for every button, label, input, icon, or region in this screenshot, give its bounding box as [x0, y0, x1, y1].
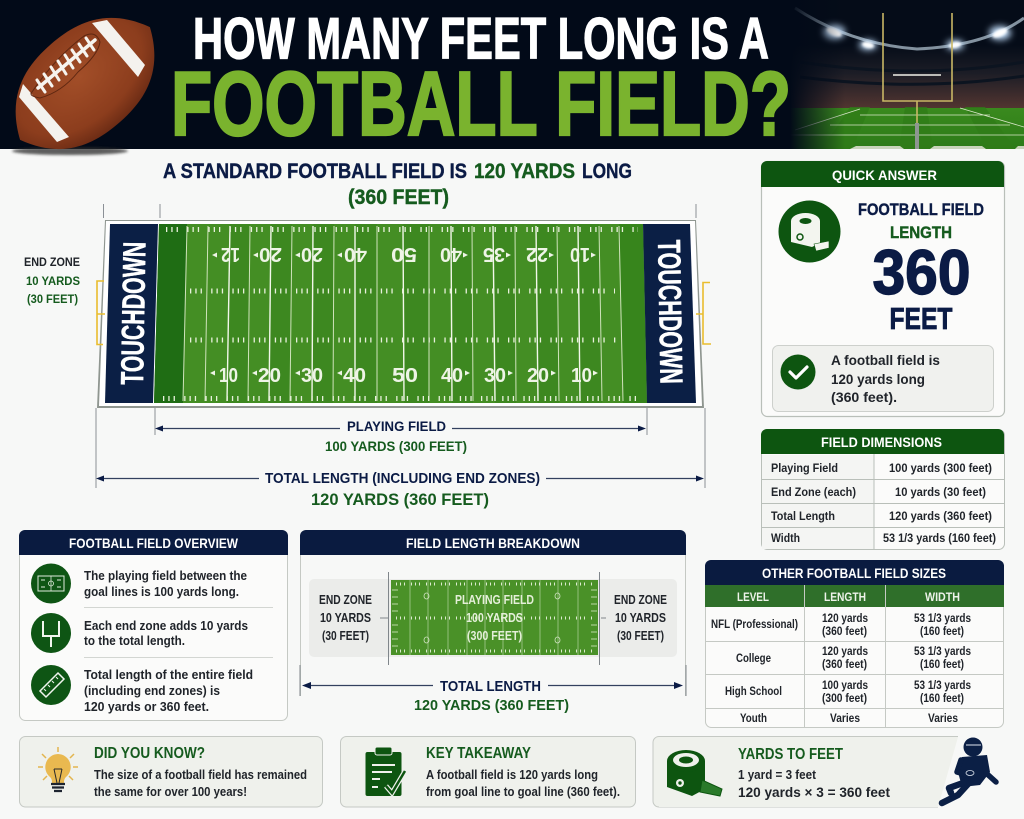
- overview text 2: to the total length.: [84, 633, 185, 648]
- answer callout: (360 feet).: [831, 390, 897, 405]
- left end zone text: (30 FEET): [322, 629, 369, 643]
- bottom yard numbers: 10: [219, 365, 238, 387]
- top yard numbers upside down: 20: [259, 243, 282, 265]
- did you know text: the same for over 100 years!: [94, 784, 247, 799]
- bottom yard numbers: 20: [258, 365, 281, 387]
- field turf: [154, 224, 647, 403]
- overview text 3: [84, 667, 253, 714]
- playing field dimension: PLAYING FIELD: [347, 418, 446, 434]
- icon: goal post: [31, 613, 71, 653]
- quick answer heading: QUICK ANSWER: [832, 167, 937, 183]
- icon: tape measure: [778, 200, 840, 262]
- end zone label: END ZONE: [24, 255, 80, 269]
- dimensions rows: Playing Field: [771, 461, 838, 475]
- column headers: [705, 585, 1004, 607]
- overview text 2: [84, 618, 248, 648]
- bottom yard numbers: 30: [301, 365, 323, 387]
- panel: did you know: DID YOU KNOW?: [94, 745, 205, 762]
- title: FOOTBALL FIELD?: [171, 54, 791, 155]
- overview text 1: goal lines is 100 yards long.: [84, 584, 239, 599]
- row college: [736, 646, 971, 671]
- top yard numbers upside down: 20: [301, 243, 323, 265]
- total length dimension: 120 YARDS (360 FEET): [311, 490, 489, 509]
- icon: light bulb: [38, 747, 78, 791]
- breakdown heading: FIELD LENGTH BREAKDOWN: [406, 535, 580, 551]
- left end zone bracket: [97, 281, 105, 344]
- length label: FOOTBALL FIELD: [858, 200, 984, 219]
- top yard numbers upside down: 40: [440, 243, 462, 265]
- big number 360 feet: 360: [872, 238, 970, 308]
- top yard numbers upside down: 12: [221, 243, 240, 265]
- left end zone text: [319, 593, 372, 643]
- total length dimension: TOTAL LENGTH (INCLUDING END ZONES): [265, 470, 540, 487]
- panel: yards to feet: [653, 736, 958, 807]
- overview text 1: The playing field between the: [84, 568, 247, 583]
- answer callout: [772, 346, 994, 412]
- icon: clipboard: [366, 747, 405, 796]
- top yard numbers upside down: 40: [344, 243, 367, 265]
- big number 360 feet: [872, 238, 970, 336]
- key takeaway text: A football field is 120 yards long: [426, 767, 598, 782]
- subtitle: (360 FEET): [348, 186, 449, 209]
- icon: ruler: [31, 665, 71, 705]
- answer callout: A football field is: [831, 353, 940, 368]
- right end zone text: END ZONE: [614, 593, 667, 607]
- overview text 3: (including end zones) is: [84, 683, 220, 698]
- top yard numbers upside down: [212, 243, 596, 265]
- mini field: (300 FEET): [467, 629, 522, 643]
- panel: other football field sizes table: [705, 560, 1004, 728]
- mini field: 100 YARDS: [466, 611, 523, 625]
- row high school: High School: [725, 686, 782, 698]
- top yard numbers upside down: 22: [526, 243, 548, 265]
- playing field dimension: 100 YARDS (300 FEET): [325, 438, 467, 454]
- conversion text: 120 yards × 3 = 360 feet: [738, 784, 890, 800]
- overview heading: [19, 530, 288, 555]
- subtitle: [163, 160, 632, 209]
- big number 360 feet: FEET: [890, 301, 953, 336]
- left end zone text: 10 YARDS: [320, 611, 371, 625]
- overview text 3: 120 yards or 360 feet.: [84, 699, 209, 714]
- dimensions rows: Width: [771, 531, 800, 545]
- bottom yard numbers: 10: [571, 365, 592, 387]
- top yard numbers upside down: 35: [483, 243, 505, 265]
- column headers: LENGTH: [824, 590, 866, 604]
- row college: 53 1/3 yards: [914, 646, 971, 658]
- row high school: (160 feet): [920, 693, 964, 705]
- row college: (360 feet): [822, 659, 867, 671]
- dimensions rows: 120 yards (360 feet): [889, 509, 992, 523]
- row college: College: [736, 653, 771, 665]
- title: [171, 6, 791, 155]
- subtitle: 120 YARDS: [474, 160, 575, 183]
- row high school: 100 yards: [822, 680, 868, 692]
- icon: field: [31, 564, 71, 604]
- total length arrow: TOTAL LENGTH: [440, 678, 541, 695]
- left end zone text: END ZONE: [319, 593, 372, 607]
- panel: field length breakdown: [300, 530, 686, 714]
- right end zone bracket: [696, 282, 711, 344]
- dimensions heading: [761, 429, 1004, 454]
- dimensions rows: 100 yards (300 feet): [889, 461, 992, 475]
- conversion text: 1 yard = 3 feet: [738, 768, 817, 782]
- mini field: PLAYING FIELD: [455, 593, 534, 607]
- main football field diagram: [97, 220, 704, 408]
- field extension lines: [96, 204, 705, 488]
- row NFL: [711, 613, 971, 638]
- did you know text: [94, 767, 307, 799]
- row NFL: 120 yards: [822, 613, 868, 625]
- bottom yard numbers: 40: [343, 365, 366, 387]
- panel: yards to feet: YARDS TO FEET: [738, 746, 843, 763]
- end zone label: [24, 255, 80, 306]
- end zone label: 10 YARDS: [26, 274, 80, 288]
- quick answer heading: [761, 161, 1004, 187]
- length label: LENGTH: [890, 223, 952, 242]
- panel: key takeaway: KEY TAKEAWAY: [426, 745, 532, 762]
- answer callout: 120 yards long: [831, 372, 925, 387]
- right end zone text: (30 FEET): [617, 629, 664, 643]
- overview heading: FOOTBALL FIELD OVERVIEW: [69, 535, 239, 551]
- top yard numbers upside down: 50: [391, 243, 417, 265]
- panel: football field overview: [19, 530, 288, 720]
- icon: football player: [942, 738, 996, 803]
- bottom yard numbers: 20: [527, 365, 549, 387]
- end zone label: (30 FEET): [27, 292, 78, 306]
- stadium photo: [790, 0, 1024, 149]
- right end zone: TOUCHDOWN: [651, 239, 690, 384]
- right end zone: [643, 224, 696, 403]
- bottom yard numbers: [210, 365, 598, 387]
- right end zone text: 10 YARDS: [615, 611, 666, 625]
- row youth: Youth: [740, 713, 767, 725]
- bottom yard numbers: 50: [392, 365, 418, 387]
- row youth: Varies: [830, 713, 860, 725]
- total length arrow: 120 YARDS (360 FEET): [414, 697, 569, 714]
- row high school: 53 1/3 yards: [914, 680, 971, 692]
- row NFL: NFL (Professional): [711, 619, 798, 631]
- header banner: [0, 0, 1024, 157]
- row youth: [740, 713, 958, 725]
- bottom yard numbers: 40: [441, 365, 463, 387]
- conversion text: [738, 768, 890, 800]
- total length arrow: [302, 678, 683, 714]
- left end zone: [105, 224, 158, 403]
- top yard numbers upside down: 10: [570, 243, 590, 265]
- row NFL: 53 1/3 yards: [914, 613, 971, 625]
- dimensions heading: FIELD DIMENSIONS: [821, 434, 942, 450]
- dimensions rows: Total Length: [771, 509, 835, 523]
- overview text 3: Total length of the entire field: [84, 667, 253, 682]
- subtitle: LONG: [582, 160, 632, 183]
- mini field: [391, 580, 598, 655]
- column headers: WIDTH: [925, 590, 960, 604]
- total length dimension: [96, 470, 704, 509]
- key takeaway text: [426, 767, 620, 799]
- row youth: Varies: [928, 713, 958, 725]
- panel: quick answer: [761, 161, 1004, 416]
- right end zone text: [614, 593, 667, 643]
- overview text 2: Each end zone adds 10 yards: [84, 618, 248, 633]
- panel: field dimensions table: [761, 429, 1004, 550]
- panel: key takeaway: [340, 736, 636, 807]
- row high school: (300 feet): [822, 693, 867, 705]
- dimensions rows: [771, 461, 996, 545]
- sizes heading: OTHER FOOTBALL FIELD SIZES: [762, 565, 946, 581]
- subtitle: A STANDARD FOOTBALL FIELD IS: [163, 160, 467, 183]
- breakdown heading: [300, 530, 686, 555]
- sizes heading: [705, 560, 1004, 585]
- did you know text: The size of a football field has remained: [94, 767, 307, 782]
- dimensions rows: 10 yards (30 feet): [895, 485, 986, 499]
- key takeaway text: from goal line to goal line (360 feet).: [426, 784, 620, 799]
- overview text 1: [84, 568, 247, 599]
- playing field dimension: [155, 418, 646, 454]
- football: [11, 18, 154, 157]
- row NFL: (360 feet): [822, 626, 867, 638]
- bottom yard numbers: 30: [484, 365, 506, 387]
- row high school: [725, 680, 971, 705]
- icon: tape measure: [667, 750, 722, 796]
- length label: [858, 200, 984, 242]
- panel: did you know: [20, 736, 322, 807]
- row college: (160 feet): [920, 659, 964, 671]
- column headers: LEVEL: [737, 590, 769, 604]
- dimensions rows: 53 1/3 yards (160 feet): [883, 531, 996, 545]
- row NFL: (160 feet): [920, 626, 964, 638]
- title: HOW MANY FEET LONG IS A: [193, 6, 769, 72]
- dimensions rows: End Zone (each): [771, 485, 856, 499]
- left end zone: TOUCHDOWN: [114, 242, 152, 385]
- row college: 120 yards: [822, 646, 868, 658]
